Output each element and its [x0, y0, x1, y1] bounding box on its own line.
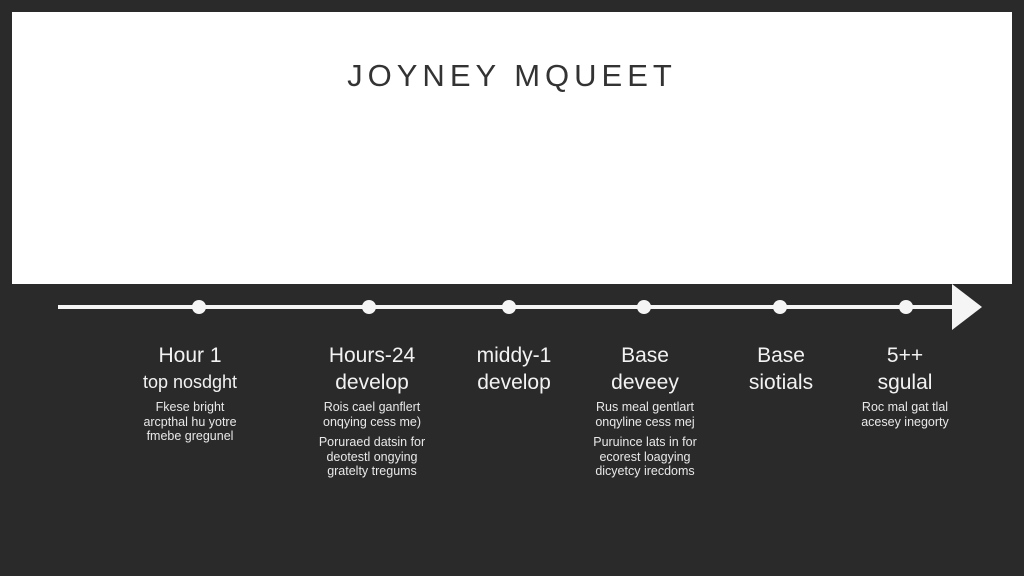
milestone 4: Puruince lats in for	[593, 435, 697, 449]
milestone 6: 5++	[887, 344, 923, 367]
milestone 2: onqying cess me)	[323, 414, 421, 428]
milestone 5	[749, 344, 813, 394]
milestone 4: deveey	[611, 371, 679, 394]
milestone 2: gratelty tregums	[327, 464, 417, 478]
milestone 2: Poruraed datsin for	[319, 435, 425, 449]
milestone 3: middy-1	[477, 344, 551, 367]
milestone 1: fmebe gregunel	[147, 429, 233, 443]
milestone 4: onqyline cess mej	[595, 414, 695, 428]
milestone 3	[477, 344, 551, 394]
milestone 4: dicyetcy irecdoms	[595, 464, 695, 478]
milestone 4	[593, 344, 697, 478]
milestone 6: sgulal	[878, 371, 932, 394]
milestone 6: acesey inegorty	[861, 414, 949, 428]
milestone 4: ecorest loagying	[599, 450, 691, 464]
milestone 2: deotestl ongying	[326, 450, 418, 464]
milestone 6	[861, 344, 949, 428]
title: JOYNEY MQUEET	[347, 58, 677, 93]
panel: header	[12, 12, 1012, 284]
milestone 2: Hours-24	[329, 344, 415, 367]
milestone 6: Roc mal gat tlal	[862, 400, 948, 414]
milestone 4: Rus meal gentlart	[596, 400, 694, 414]
milestone 1: top nosdght	[143, 372, 237, 392]
milestone 1	[143, 344, 237, 443]
milestone 2: Rois cael ganflert	[324, 400, 420, 414]
milestone 4: Base	[621, 344, 669, 367]
milestone 1: arcpthal hu yotre	[143, 414, 237, 428]
milestone 5: siotials	[749, 371, 813, 394]
milestone 1: Fkese bright	[156, 400, 224, 414]
milestone 3: develop	[477, 371, 551, 394]
milestone 2: develop	[335, 371, 409, 394]
milestone 1: Hour 1	[158, 344, 222, 367]
milestone 2	[319, 344, 425, 478]
milestone 5: Base	[757, 344, 805, 367]
